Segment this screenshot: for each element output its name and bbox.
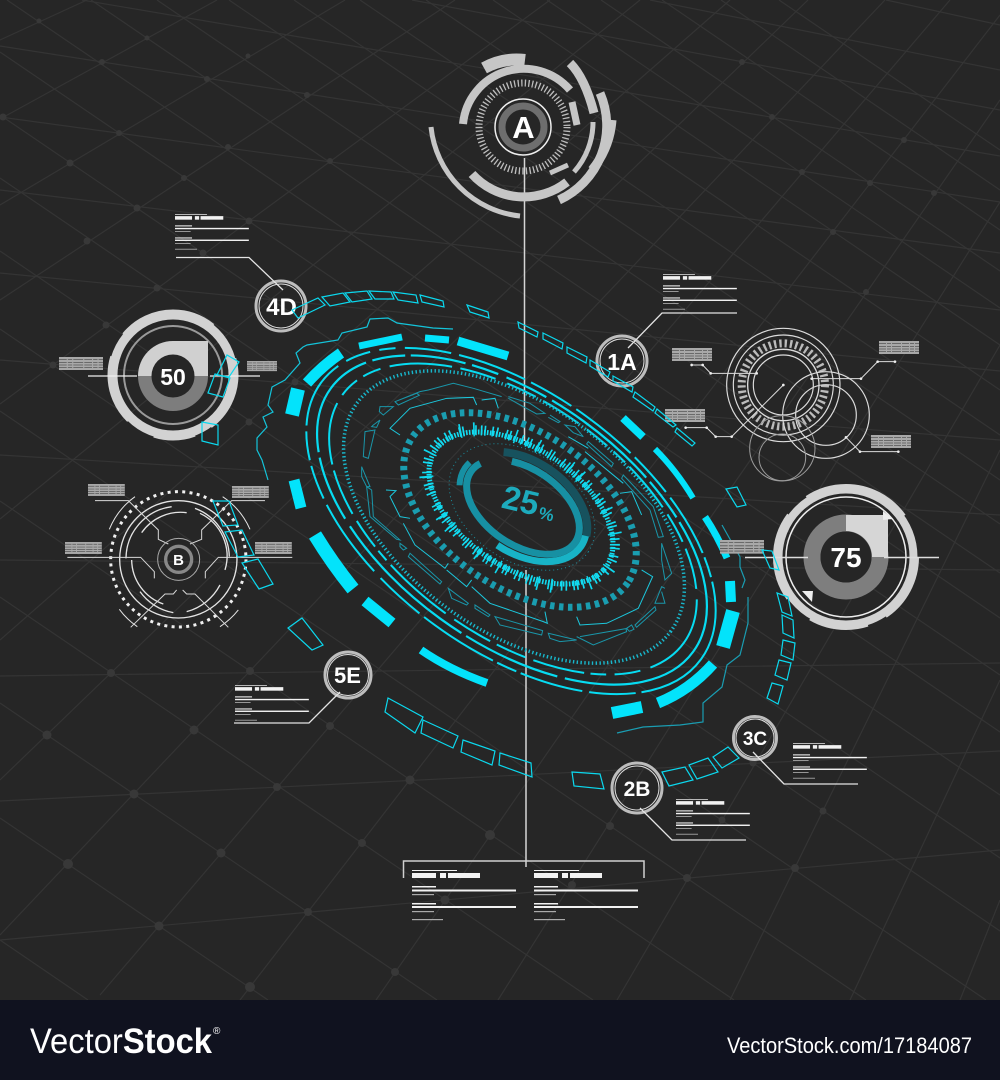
dial B dotted ring — [111, 492, 246, 627]
gauge 50 lower half — [138, 376, 208, 411]
badge 1A: 1A — [607, 349, 637, 375]
cyan orbit boxes — [202, 291, 795, 789]
badge 1A — [597, 336, 647, 386]
outer gear outline lower-right — [617, 525, 748, 733]
footer bar — [0, 1000, 1000, 1080]
thin dashed ring three — [274, 301, 752, 737]
hub A — [431, 60, 612, 216]
badge 5E — [325, 652, 371, 698]
badge 4D — [256, 281, 306, 331]
hub A core — [495, 99, 551, 155]
gauge 50 hole — [152, 354, 194, 398]
gauge 50 — [59, 311, 277, 439]
hub A gauge — [502, 106, 544, 148]
text block 5E — [235, 685, 309, 721]
badge 3C: 3C — [743, 729, 767, 750]
gauge 75 corner markers — [802, 511, 893, 602]
text block 3C — [793, 743, 867, 779]
gauge 50 value: 50 — [160, 364, 186, 390]
text block 1A — [663, 274, 737, 310]
thin dashed ring one — [245, 279, 777, 763]
audio spectrum ring — [398, 397, 644, 619]
overlap dial nodes — [684, 360, 900, 453]
inner dotted ring — [425, 417, 619, 597]
gauge 75 inner circle — [786, 497, 906, 617]
dotted ring — [291, 312, 737, 722]
gauge 75 hole — [820, 532, 872, 582]
central radial diagram — [245, 279, 777, 763]
overlap dial outer rings — [727, 328, 840, 442]
gauge 75 dark donut — [812, 523, 880, 591]
dial B main ring — [120, 501, 237, 618]
badge 4D: 4D — [266, 294, 297, 321]
thin ring two — [259, 290, 765, 750]
gauge 75 — [720, 486, 939, 628]
gauge 75 value: 75 — [830, 542, 862, 573]
gauge 50 torn ring — [113, 315, 233, 435]
dial B inner arcs two — [132, 512, 227, 604]
bottom bracket — [404, 861, 644, 878]
badge 2B: 2B — [624, 778, 650, 801]
dial B inner arcs — [126, 507, 229, 613]
gauge 75 torn ring — [778, 490, 914, 624]
circuit dial B — [65, 484, 292, 627]
centre value: % — [537, 504, 556, 525]
gauge 75 label — [720, 540, 764, 554]
dial B labels — [65, 484, 292, 554]
overlap dial tick ring — [742, 343, 825, 427]
connector line from A to centre — [524, 158, 526, 867]
overlap dial connector lines — [686, 362, 898, 452]
gauge 75 light quadrant — [846, 515, 888, 557]
dial B outer corner arcs — [109, 497, 250, 627]
leader lines — [176, 258, 858, 840]
bottom text block right — [534, 870, 638, 920]
centre value: 25 — [499, 478, 543, 522]
overlapping circles dial — [665, 328, 919, 481]
text block 4D — [175, 214, 249, 250]
overlap dial lower circles — [750, 416, 815, 481]
gauge 50 right label — [247, 361, 277, 371]
inner gear segments — [362, 383, 672, 645]
gauge 50 left label — [59, 357, 103, 370]
inner gauge arcs — [438, 429, 608, 585]
dial B letter: B — [173, 552, 184, 569]
gauge 50 upper half — [138, 341, 208, 376]
hub A torn arcs — [431, 60, 612, 216]
hub A letter: A — [512, 110, 535, 145]
overlap dial big circles — [783, 372, 869, 458]
badge 5E: 5E — [334, 663, 361, 688]
footer image id: VectorStock.com/17184087 — [727, 1033, 972, 1058]
dial B circuit lines — [67, 501, 292, 627]
thick tick ring — [369, 373, 671, 647]
thick cyan segments — [292, 337, 733, 713]
gauge 50 axis lines — [88, 375, 260, 377]
badge 3C — [734, 716, 776, 760]
bottom text block left — [412, 870, 516, 920]
centre value — [499, 478, 560, 526]
overlap dial inner rings — [748, 349, 819, 421]
hub A tick ring — [479, 83, 567, 171]
overlap dial labels — [665, 341, 919, 448]
badge 2B — [612, 763, 662, 813]
outer gear outline upper-left — [257, 318, 453, 480]
footer logo: VectorStock — [30, 1022, 212, 1061]
dial B hub gauge — [166, 546, 192, 572]
dial B hub rings — [158, 538, 200, 580]
text block 2B — [676, 799, 750, 835]
gauge 50 inner circle — [124, 326, 222, 424]
gauge 75 axis lines — [745, 556, 939, 558]
footer registered mark: ® — [213, 1026, 221, 1037]
